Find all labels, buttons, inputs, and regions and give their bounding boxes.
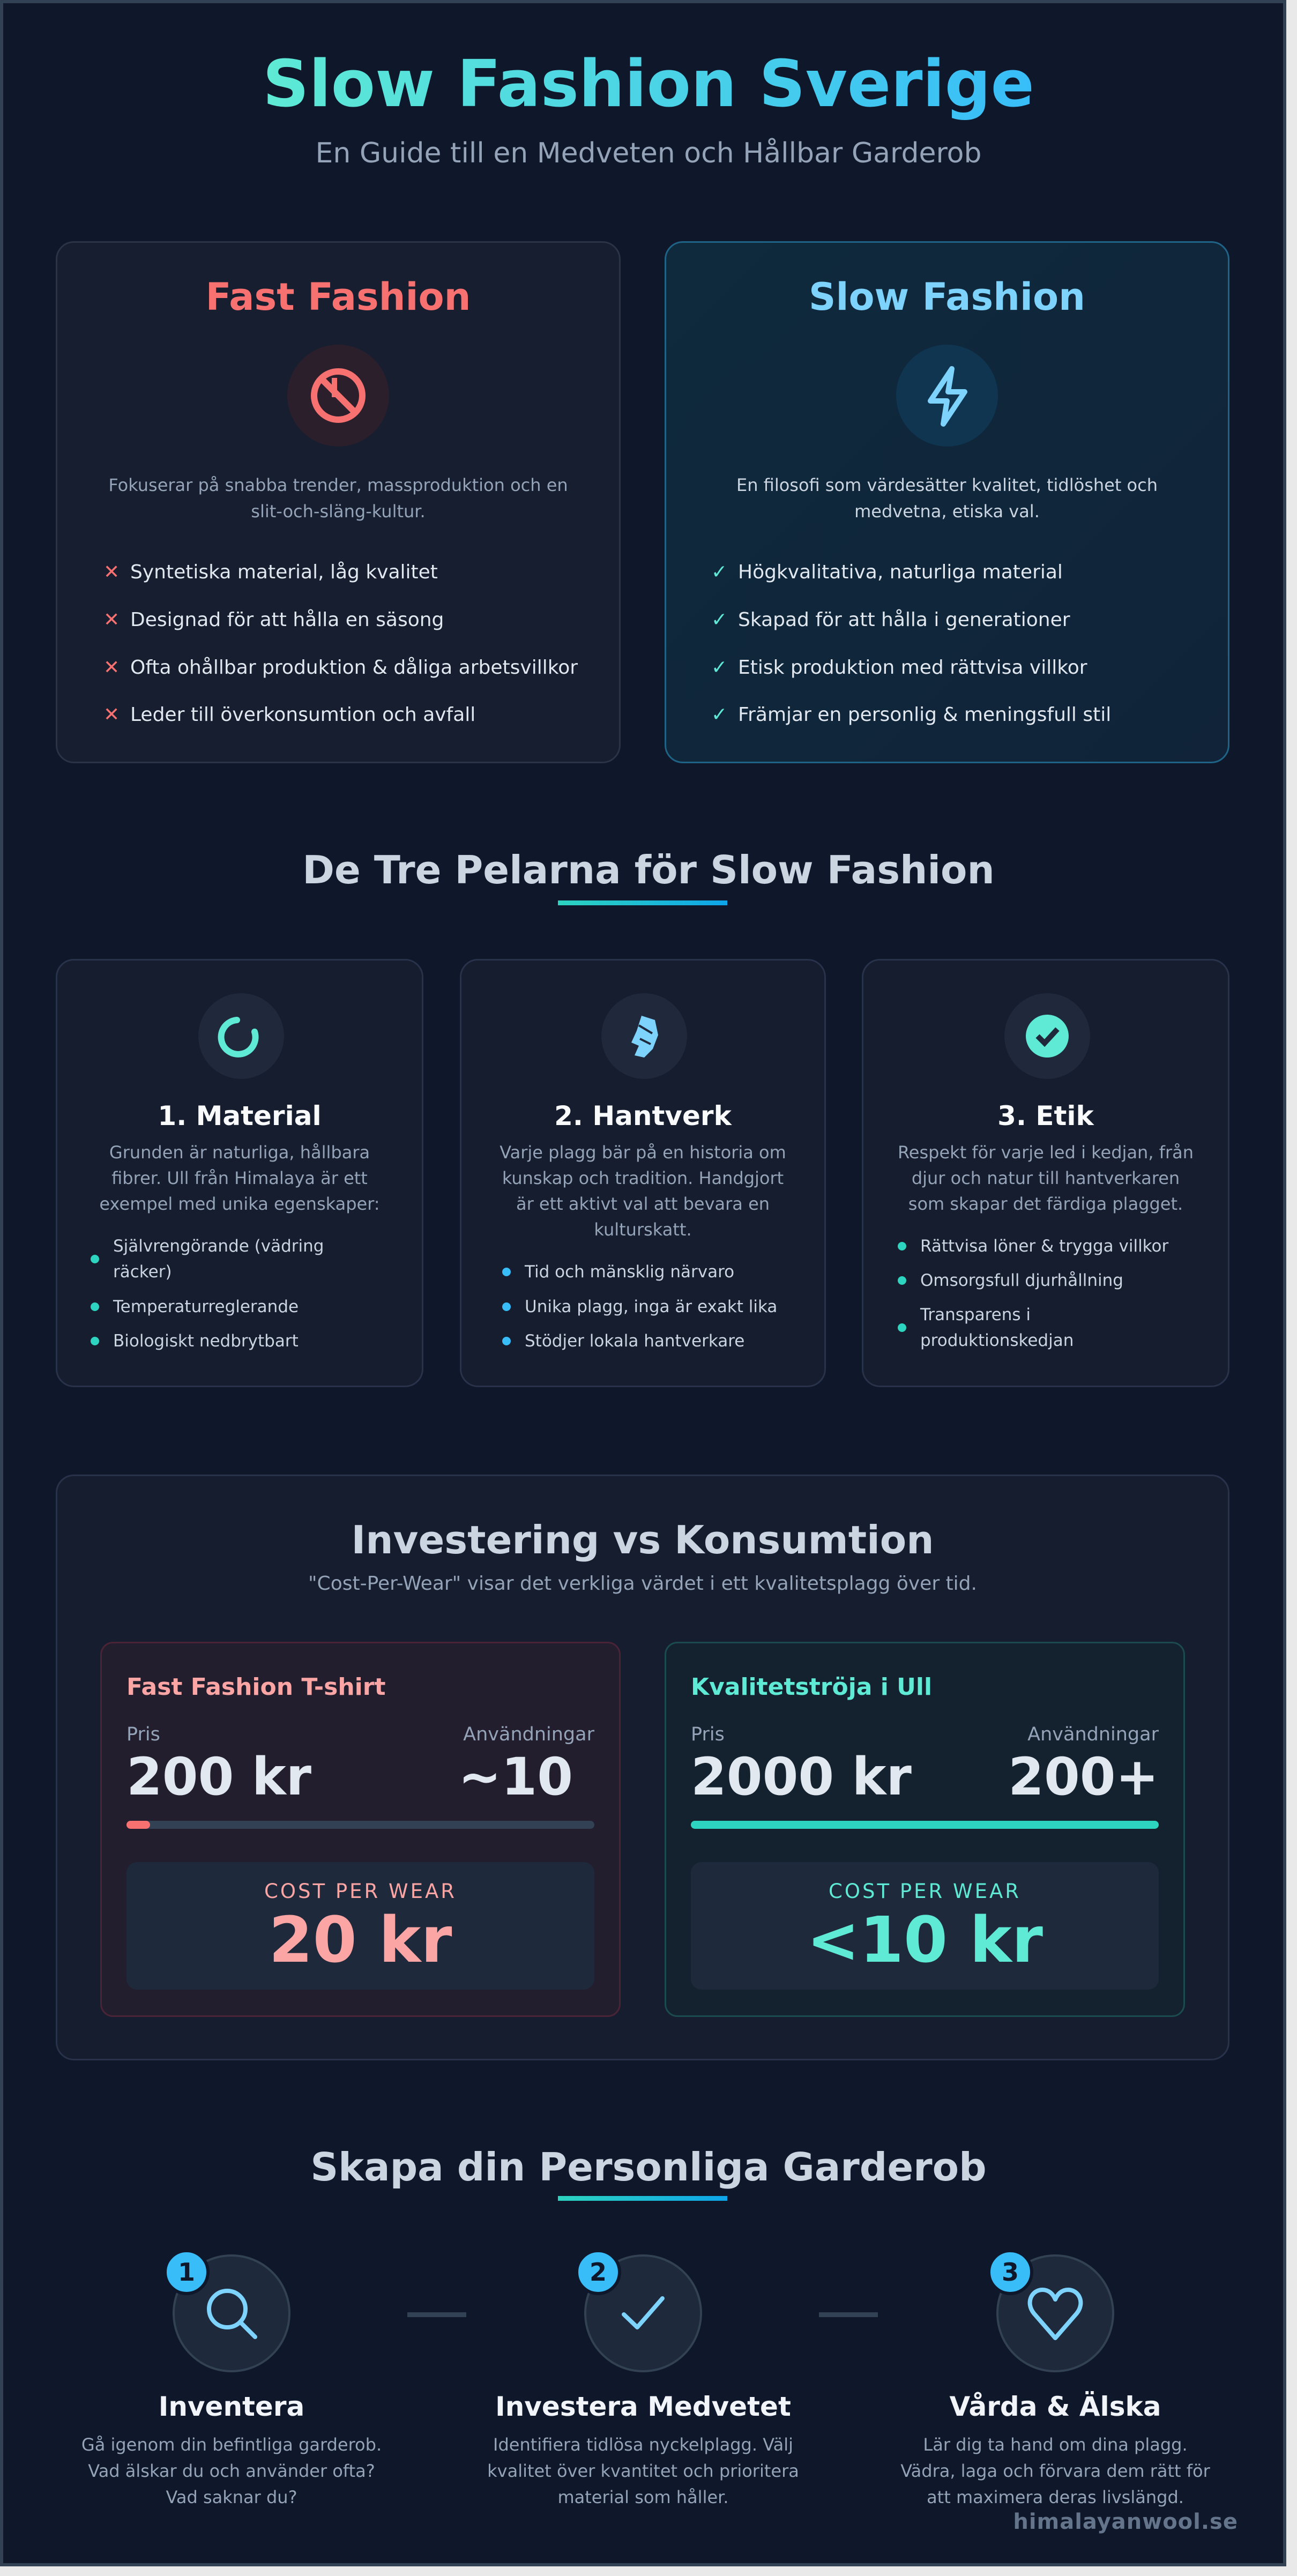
heading: Investering vs Konsumtion — [351, 1517, 934, 1562]
badge 2 — [575, 2249, 621, 2295]
step text: Identifiera tidlösa nyckelplagg. Välj kvalitet över kvantitet och prioritera material som håller. — [487, 2434, 799, 2507]
bullet list — [91, 1237, 324, 1351]
step title: Investera Medvetet — [495, 2391, 791, 2422]
step text: Gå igenom din befintliga garderob. Vad älskar du och använder ofta? Vad saknar du? — [81, 2434, 382, 2507]
cost per wear box: 20 kr — [269, 1903, 452, 1977]
description: En filosofi som värdesätter kvalitet, tidlöshet och medvetna, etiska val. — [736, 475, 1158, 522]
icon: no symbol — [287, 345, 389, 446]
bullet list: Stödjer lokala hantverkare — [525, 1331, 744, 1351]
panel: investering vs konsumtion — [56, 1475, 1229, 2060]
list: slow fashion pros: Högkvalitativa, naturliga material — [738, 561, 1063, 583]
values: ~10 — [458, 1747, 573, 1807]
list: slow fashion pros — [711, 561, 1111, 726]
list: slow fashion pros: ✓ — [711, 704, 727, 726]
title: 3. Etik — [997, 1100, 1094, 1131]
list: fast fashion cons: Ofta ohållbar produktion & dåliga arbetsvillkor — [130, 657, 578, 679]
labels: Användningar — [463, 1724, 594, 1745]
list: fast fashion cons: ✕ — [103, 561, 120, 583]
icon: check circle — [1004, 993, 1090, 1079]
card: fast fashion t-shirt — [100, 1642, 621, 2017]
bullet list — [502, 1262, 777, 1351]
cost per wear box: <10 kr — [807, 1903, 1043, 1977]
bullet list: Transparens i produktionskedjan — [920, 1305, 1074, 1350]
badge 1 — [163, 2249, 210, 2295]
card title: Kvalitetströja i Ull — [691, 1673, 932, 1701]
bullet list: Omsorgsfull djurhållning — [920, 1271, 1123, 1290]
panel: pillar 3 etik — [862, 959, 1229, 1387]
panel: fast fashion — [56, 241, 621, 763]
step title: Inventera — [159, 2391, 304, 2422]
underline — [558, 900, 727, 905]
labels: Pris — [691, 1724, 725, 1745]
list: slow fashion pros: Främjar en personlig & meningsfull stil — [738, 704, 1111, 726]
list: slow fashion pros: Etisk produktion med rättvisa villkor — [738, 657, 1087, 679]
icon: craft — [601, 993, 687, 1079]
bullet list: Självrengörande (vädring räcker) — [113, 1237, 324, 1282]
bullet list: Rättvisa löner & trygga villkor — [920, 1237, 1168, 1256]
badge 1: 1 — [178, 2258, 195, 2287]
description: Varje plagg bär på en historia om kunskap och tradition. Handgjort är ett aktivt val att bevara en kulturskatt. — [500, 1142, 786, 1240]
panel: pillar 1 material — [56, 959, 423, 1387]
list: slow fashion pros: ✓ — [711, 657, 727, 679]
list: slow fashion pros: Skapad för att hålla i generationer — [738, 609, 1070, 631]
values — [691, 1747, 1159, 1807]
cost per wear box: COST PER WEAR — [829, 1880, 1021, 1903]
heading: fast fashion: Fast Fashion — [206, 275, 471, 319]
bar — [126, 1821, 594, 1829]
description: Grunden är naturliga, hållbara fibrer. Ull från Himalaya är ett exempel med unika egenskaper: — [99, 1142, 380, 1214]
cost per wear box — [126, 1862, 594, 1990]
heading: slow fashion: Slow Fashion — [809, 275, 1085, 319]
step 2 — [487, 2252, 799, 2507]
panel: slow fashion — [665, 241, 1229, 763]
step 3 — [900, 2252, 1210, 2507]
list: slow fashion pros: ✓ — [711, 561, 727, 583]
icon: lightning — [896, 345, 998, 446]
labels: Pris — [126, 1724, 160, 1745]
list: fast fashion cons: Designad för att hålla en säsong — [130, 609, 444, 631]
icon: check — [584, 2254, 702, 2372]
bullet list: Biologiskt nedbrytbart — [113, 1331, 299, 1351]
icon: ring — [198, 993, 284, 1079]
values: 2000 kr — [691, 1747, 912, 1807]
list: fast fashion cons: ✕ — [103, 609, 120, 631]
description: Respekt för varje led i kedjan, från djur och natur till hantverkaren som skapar det färdiga plagget. — [898, 1142, 1194, 1214]
bullet list — [898, 1237, 1168, 1350]
heading: personal wardrobe: Skapa din Personliga Garderob — [310, 2145, 987, 2190]
bar — [691, 1821, 1159, 1829]
title: Slow Fashion Sverige — [263, 47, 1034, 122]
underline — [558, 2196, 727, 2201]
values — [126, 1747, 573, 1807]
title: 1. Material — [158, 1100, 322, 1131]
values: 200 kr — [126, 1747, 311, 1807]
badge 3: 3 — [1002, 2258, 1019, 2287]
step title: Vårda & Älska — [950, 2391, 1161, 2422]
subtitle: "Cost-Per-Wear" visar det verkliga värdet i ett kvalitetsplagg över tid. — [308, 1573, 977, 1595]
list: fast fashion cons — [103, 561, 578, 726]
badge 3 — [987, 2249, 1033, 2295]
description: Fokuserar på snabba trender, massproduktion och en slit-och-släng-kultur. — [108, 475, 568, 522]
connector — [407, 2312, 466, 2317]
list: slow fashion pros: ✓ — [711, 609, 727, 631]
card title: Fast Fashion T-shirt — [126, 1673, 385, 1701]
title: 2. Hantverk — [554, 1100, 732, 1131]
footer brand: himalayanwool.se — [1013, 2510, 1238, 2534]
card: kvalitetströja i ull — [665, 1642, 1185, 2017]
labels: Användningar — [1027, 1724, 1159, 1745]
icon: search — [173, 2254, 290, 2372]
icon: heart — [996, 2254, 1114, 2372]
list: fast fashion cons: ✕ — [103, 657, 120, 679]
list: fast fashion cons: ✕ — [103, 704, 120, 726]
badge 2: 2 — [590, 2258, 607, 2287]
step 1 — [81, 2252, 382, 2507]
subtitle: En Guide till en Medveten och Hållbar Garderob — [315, 137, 982, 169]
labels — [126, 1724, 594, 1745]
connector — [819, 2312, 878, 2317]
bullet list: Tid och mänsklig närvaro — [525, 1262, 734, 1282]
list: fast fashion cons: Syntetiska material, låg kvalitet — [130, 561, 438, 583]
cost per wear box: COST PER WEAR — [264, 1880, 457, 1903]
values: 200+ — [1008, 1747, 1159, 1807]
bullet list: Unika plagg, inga är exakt lika — [525, 1297, 777, 1316]
labels — [691, 1724, 1159, 1745]
cost per wear box — [691, 1862, 1159, 1990]
heading: three pillars: De Tre Pelarna för Slow Fashion — [302, 847, 995, 892]
panel: pillar 2 hantverk — [460, 959, 826, 1387]
step text: Lär dig ta hand om dina plagg. Vädra, laga och förvara dem rätt för att maximera deras livslängd. — [900, 2434, 1210, 2507]
bullet list: Temperaturreglerande — [113, 1297, 299, 1316]
list: fast fashion cons: Leder till överkonsumtion och avfall — [130, 704, 475, 726]
